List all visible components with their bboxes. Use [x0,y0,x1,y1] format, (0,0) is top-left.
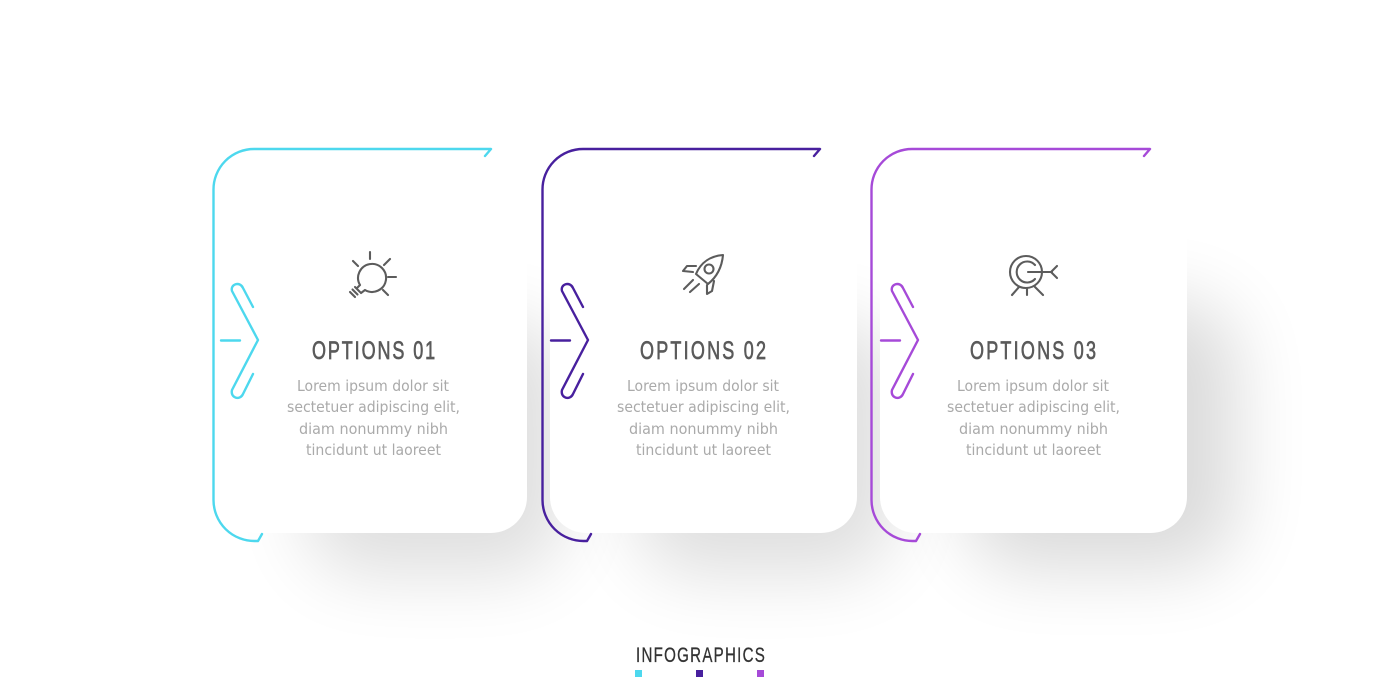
card 1 body text [287,377,460,459]
card 2 body text: tincidunt ut laoreet [636,441,771,459]
card 3 body text: diam nonummy nibh [959,420,1108,438]
legend squares [635,670,764,677]
panel: options 01 [213,149,527,541]
card 2 chevron arrow [551,284,588,398]
card 1 heading: OPTIONS 01 [312,336,435,365]
panel: options 02 [542,149,857,541]
card 2 body text: Lorem ipsum dolor sit [627,377,779,395]
card 2 body text: sectetuer adipiscing elit, [617,398,790,416]
card 1 outline frame [213,149,491,541]
card 1 body text: Lorem ipsum dolor sit [297,377,449,395]
card 3 body text: Lorem ipsum dolor sit [957,377,1109,395]
icon: rocket [683,255,723,294]
card 3 heading: OPTIONS 03 [970,336,1096,365]
card 3 chevron arrow [881,284,918,398]
card 1 background [220,165,527,533]
card 2 heading: OPTIONS 02 [640,336,766,365]
footer title: INFOGRAPHICS [636,642,765,667]
card 1 body text: diam nonummy nibh [299,420,448,438]
card 1 body text: tincidunt ut laoreet [306,441,441,459]
card 2 outline frame [542,149,820,541]
card 3 body text [947,377,1120,459]
card 3 body text: tincidunt ut laoreet [966,441,1101,459]
card 1 chevron arrow [221,284,258,398]
card 3 outline frame [871,149,1150,541]
card 3 body text: sectetuer adipiscing elit, [947,398,1120,416]
card 3 background [880,165,1187,533]
icon: target with arrow [1010,256,1057,295]
card 2 body text [617,377,790,459]
card 2 body text: diam nonummy nibh [629,420,778,438]
card 1 body text: sectetuer adipiscing elit, [287,398,460,416]
panel: options 03 [871,149,1187,541]
card 2 background [550,165,857,533]
icon: light bulb [350,252,396,297]
